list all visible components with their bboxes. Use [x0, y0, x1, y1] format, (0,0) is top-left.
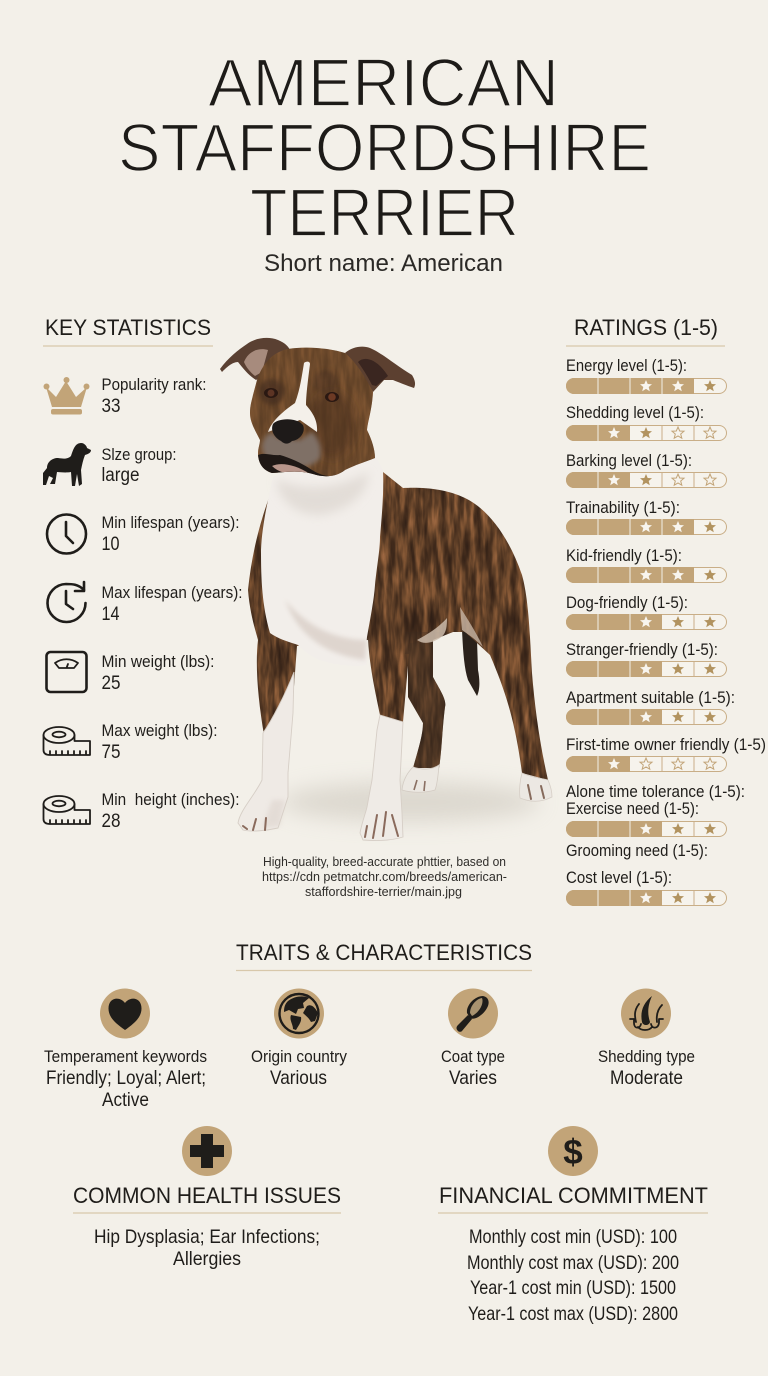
title — [118, 45, 651, 251]
dog photo — [220, 338, 560, 841]
head — [250, 348, 375, 476]
rating: energy level — [566, 356, 726, 394]
rating: barking level: Barking level (1-5): — [566, 451, 692, 470]
left ear — [220, 338, 290, 380]
rating: cost level — [566, 868, 726, 906]
stat: max lifespan — [102, 583, 242, 625]
stat: size group — [102, 445, 176, 486]
trait: coat — [441, 1047, 505, 1089]
trait: temperament — [44, 1047, 207, 1111]
stat: min weight: 25 — [102, 673, 120, 694]
trait: origin: Various — [270, 1067, 327, 1089]
rating: stranger-friendly — [566, 640, 726, 677]
icon: clock — [47, 514, 86, 554]
cost list — [467, 1226, 679, 1325]
panel: ratings — [566, 315, 766, 906]
hind toes — [528, 785, 544, 799]
front right leg white — [360, 715, 403, 841]
rating: barking level — [566, 451, 726, 488]
stat: max lifespan: Max lifespan (years): — [102, 583, 242, 602]
trait: temperament: Active — [102, 1089, 149, 1111]
rating: exercise need: Exercise need (1-5): — [566, 799, 699, 818]
trait: shedding — [598, 1047, 695, 1089]
ground shadow — [280, 782, 540, 822]
neck shadow — [276, 472, 368, 515]
trait: origin: Origin country — [251, 1047, 347, 1066]
icon: dog silhouette — [43, 443, 91, 486]
left eye — [264, 388, 278, 398]
trait: coat: Coat type — [441, 1047, 505, 1066]
rating: trainability — [566, 498, 726, 535]
trait: temperament: Friendly; Loyal; Alert; — [46, 1067, 206, 1089]
title: TERRIER — [250, 175, 519, 251]
icon: heart — [100, 988, 150, 1038]
near leg white lower shading — [262, 800, 285, 828]
panel: common health issues — [73, 1126, 341, 1270]
title: AMERICAN — [208, 45, 559, 121]
cost list: Monthly cost min (USD): 100 — [469, 1226, 677, 1248]
icon: medical cross — [182, 1126, 232, 1176]
icon: clock with arrow — [48, 582, 86, 622]
chest shading — [285, 600, 367, 660]
health issues text: Allergies — [173, 1248, 241, 1270]
icon: measuring tape 2 — [44, 796, 90, 824]
stat: size group: large — [102, 465, 140, 486]
stat: popularity rank — [102, 375, 206, 417]
stat: min lifespan: 10 — [102, 534, 120, 555]
stat: min height: 28 — [102, 811, 120, 832]
brindle body — [248, 472, 548, 780]
trait: shedding: Shedding type — [598, 1047, 695, 1066]
white chest — [261, 440, 383, 666]
stat: min lifespan: Min lifespan (years): — [102, 513, 240, 532]
icon: dollar: $ — [563, 1133, 583, 1172]
photo caption — [262, 854, 507, 899]
heading: COMMON HEALTH ISSUES — [73, 1183, 341, 1208]
far hind leg — [402, 640, 446, 792]
right eye — [325, 392, 339, 402]
icon: brush — [448, 988, 498, 1038]
hind foot — [520, 773, 552, 801]
stat: min height: Min height (inches): — [102, 790, 240, 809]
nose — [272, 419, 304, 444]
heading: TRAITS & CHARACTERISTICS — [236, 940, 532, 965]
rating: alone time tolerance: Alone time tolerance (1-5): — [566, 782, 745, 801]
cost list: Year-1 cost max (USD): 2800 — [468, 1303, 678, 1325]
stat: max weight: Max weight (lbs): — [102, 721, 218, 740]
cost list: Year-1 cost min (USD): 1500 — [470, 1277, 676, 1299]
rating: kid-friendly: Kid-friendly (1-5): — [566, 546, 682, 565]
tail — [462, 630, 479, 696]
rating: dog-friendly — [566, 593, 726, 630]
rating: stranger-friendly: Stranger-friendly (1-5): — [566, 640, 718, 659]
photo caption: High-quality, breed-accurate phttier, based on — [263, 854, 506, 869]
icon: weight scale — [46, 652, 86, 692]
right ear inner — [358, 359, 388, 386]
right ear — [345, 347, 415, 392]
toes — [243, 812, 398, 838]
stat: min weight: Min weight (lbs): — [102, 652, 214, 671]
heading: FINANCIAL COMMITMENT — [439, 1183, 708, 1208]
rating: exercise need — [566, 799, 726, 837]
title: STAFFORDSHIRE — [118, 110, 651, 186]
front left leg white — [238, 672, 294, 831]
photo caption: https://cdn petmatchr.com/breeds/american- — [262, 869, 507, 884]
panel: financial commitment — [438, 1126, 708, 1325]
health issues text — [94, 1226, 320, 1270]
rating: dog-friendly: Dog-friendly (1-5): — [566, 593, 688, 612]
rating: shedding level: Shedding level (1-5): — [566, 403, 704, 422]
rating: grooming need: Grooming need (1-5): — [566, 841, 708, 860]
stat: min height — [102, 790, 240, 832]
rating: apartment suitable — [566, 688, 735, 725]
trait: temperament: Temperament keywords — [44, 1047, 207, 1066]
trait: shedding: Moderate — [610, 1067, 683, 1089]
stat: max weight — [102, 721, 218, 763]
stat: popularity rank: Popularity rank: — [102, 375, 206, 394]
rating: shedding level — [566, 403, 726, 441]
icon: dollar — [548, 1126, 598, 1176]
heading: RATINGS (1-5) — [574, 315, 718, 340]
stat: max lifespan: 14 — [102, 604, 120, 625]
stat: max weight: 75 — [102, 742, 120, 763]
panel: key statistics — [43, 315, 242, 832]
rating: first-time owner friendly — [566, 735, 766, 772]
stat: size group: Slze group: — [102, 445, 176, 464]
rating: apartment suitable: Apartment suitable (1-5): — [566, 688, 735, 707]
icon: measuring tape — [44, 727, 90, 755]
health issues text: Hip Dysplasia; Ear Infections; — [94, 1226, 320, 1248]
rating: cost level: Cost level (1-5): — [566, 868, 672, 887]
belly fold — [417, 618, 447, 643]
icon: hair follicles — [621, 988, 671, 1038]
inner thigh highlight — [460, 607, 483, 647]
rating: energy level: Energy level (1-5): — [566, 356, 687, 375]
stat: min weight — [102, 652, 214, 694]
rating: trainability: Trainability (1-5): — [566, 498, 680, 517]
icon: globe — [274, 988, 324, 1038]
subtitle: Short name: American — [264, 250, 503, 277]
trait: origin — [251, 1047, 347, 1089]
trait: coat: Varies — [449, 1067, 497, 1089]
heading: KEY STATISTICS — [45, 315, 211, 340]
cost list: Monthly cost max (USD): 200 — [467, 1252, 679, 1274]
stat: popularity rank: 33 — [102, 396, 120, 417]
rating: kid-friendly — [566, 546, 726, 583]
stat: min lifespan — [102, 513, 240, 555]
icon: crown — [44, 377, 90, 414]
photo caption: staffordshire-terrier/main.jpg — [305, 884, 462, 899]
panel: traits and characteristics — [44, 940, 695, 1111]
left ear inner — [244, 349, 268, 376]
